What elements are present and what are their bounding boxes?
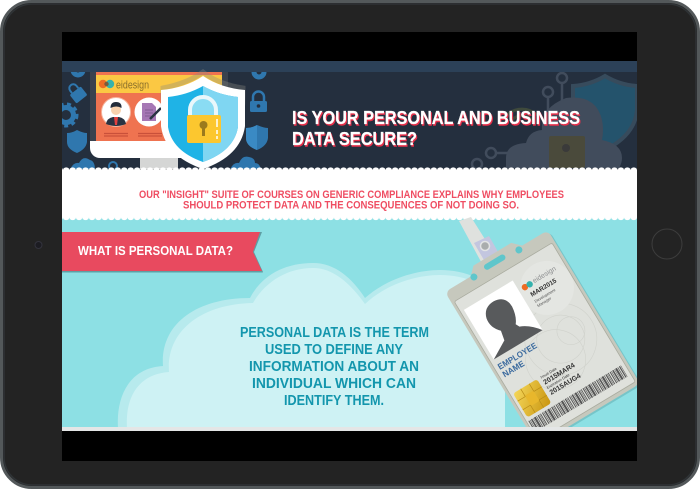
cloud xyxy=(118,263,505,428)
shield with padlock xyxy=(161,72,245,169)
header title: DATA SECURE? xyxy=(293,130,418,150)
intro text xyxy=(139,189,564,212)
employee name xyxy=(497,342,538,378)
badge logo: Manager xyxy=(536,295,553,308)
employee name: EMPLOYEE xyxy=(496,340,539,372)
intro text: OUR "INSIGHT" SUITE OF COURSES ON GENERIC COMPLIANCE EXPLAINS WHY EMPLOYEES xyxy=(139,189,564,201)
icon: document and pen xyxy=(134,98,164,126)
background icons left xyxy=(62,72,268,169)
cloud body text: IDENTIFY THEM. xyxy=(284,393,384,409)
black screen xyxy=(62,32,637,461)
monitor illustration xyxy=(90,72,228,169)
dates: 2015AUG4 xyxy=(549,373,582,397)
dates xyxy=(540,362,581,395)
dates: Expiration Date xyxy=(546,373,570,390)
barcode xyxy=(532,371,624,427)
teal panel xyxy=(62,217,637,427)
header title: DATA SECURE? xyxy=(292,128,417,149)
header title: IS YOUR PERSONAL AND BUSINESS xyxy=(293,108,581,130)
cloud body text: INDIVIDUAL WHICH CAN xyxy=(252,376,416,392)
cloud body text: USED TO DEFINE ANY xyxy=(265,342,403,358)
lanyard clip xyxy=(459,217,498,262)
camera xyxy=(35,242,42,248)
badge logo xyxy=(522,267,556,308)
ID badge xyxy=(447,232,637,427)
cloud body text xyxy=(240,325,429,409)
dates: Issue Date xyxy=(540,367,558,380)
ribbon heading xyxy=(62,232,263,272)
white intro band xyxy=(62,167,637,220)
dates: 2015MAR4 xyxy=(542,362,577,386)
header title xyxy=(292,110,580,147)
header panel xyxy=(55,61,642,447)
eidesign logo: eidesign xyxy=(116,80,149,92)
background icons right faded xyxy=(472,73,637,169)
intro text: SHOULD PROTECT DATA AND THE CONSEQUENCES OF NOT DOING SO. xyxy=(183,200,519,212)
icon: person xyxy=(102,98,130,126)
card guilloche xyxy=(524,304,597,390)
home button xyxy=(652,229,682,259)
cloud body text: PERSONAL DATA IS THE TERM xyxy=(240,325,429,341)
badge logo: Development xyxy=(533,287,557,304)
photo xyxy=(464,280,543,360)
chip xyxy=(513,379,551,417)
header title: IS YOUR PERSONAL AND BUSINESS xyxy=(292,107,580,128)
employee name: NAME xyxy=(500,358,526,379)
badge logo: eidesign xyxy=(532,266,558,285)
cloud body text: INFORMATION ABOUT AN xyxy=(249,359,419,375)
badge logo: MAR2015 xyxy=(529,277,558,299)
ribbon heading: WHAT IS PERSONAL DATA? xyxy=(78,244,233,258)
